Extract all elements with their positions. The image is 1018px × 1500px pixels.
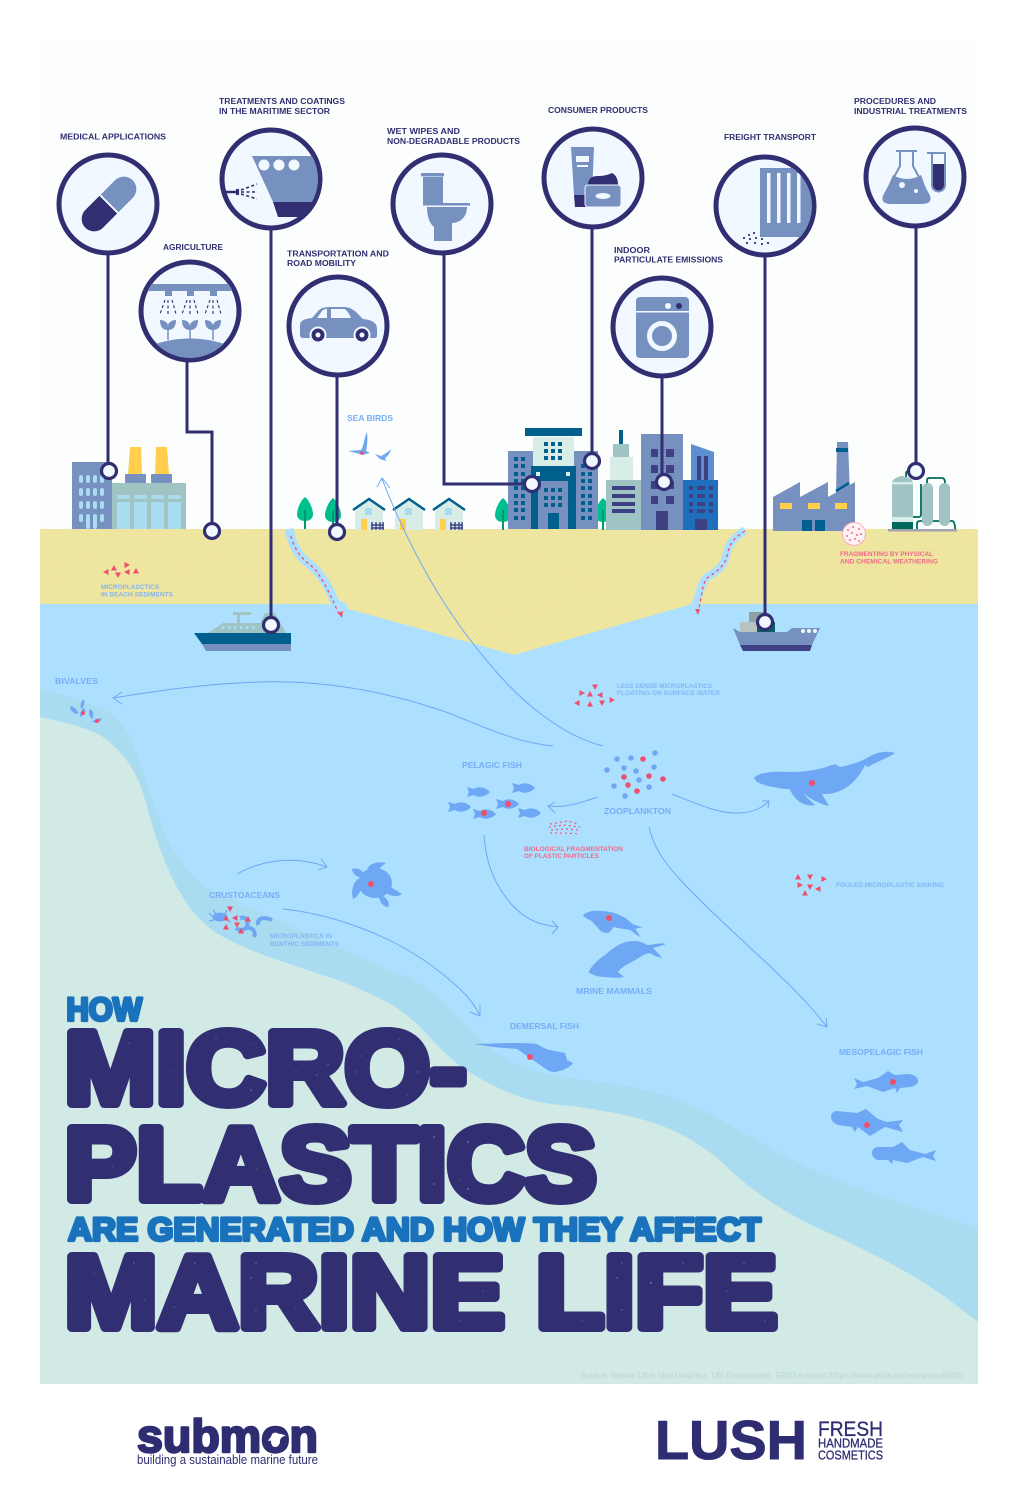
crustaceans: BENTHIC SEDIMENTS [270, 941, 340, 948]
source: wet wipes [387, 126, 520, 253]
icon: wave in logo [268, 1434, 286, 1444]
arrow: to bivalves [113, 682, 553, 746]
icon: bird with plastic [348, 432, 370, 455]
biological fragmentation: OF PLASTIC PARTICLES [524, 853, 600, 860]
panel: benthic sediment band [40, 688, 978, 1384]
icon: bird [375, 449, 391, 461]
source note: Source: Marine Litter Vital Graphics. UN-Environment, GRID-Arendal (https://www.grida.no/resources/6933). [581, 1371, 965, 1380]
triangles: sinking plastics [795, 874, 827, 896]
crustaceans: CRUSTOACEANS [209, 890, 280, 900]
connector: wet wipes [444, 250, 540, 492]
source: indoor particulate emissions [613, 245, 723, 376]
source: agriculture [140, 242, 240, 370]
arrow: zooplankton to whale [672, 794, 769, 813]
marine mammals [576, 911, 666, 996]
sea birds [347, 413, 393, 461]
connector: freight transport [758, 252, 772, 630]
demersal fish: DEMERSAL FISH [510, 1021, 579, 1031]
fouled microplastic sinking: FOULED MICROPLASTIC SINKING [836, 882, 944, 889]
connector: road transport [330, 372, 344, 540]
source: maritime treatments: TREATMENTS AND COATINGS [219, 96, 345, 106]
boat: cargo ship [733, 612, 820, 651]
source: industrial treatments: PROCEDURES AND [854, 96, 936, 106]
arrow: zooplankton to pelagic fish [548, 797, 598, 813]
triangles: floating plastics [574, 684, 615, 706]
connector: maritime [264, 225, 278, 632]
whale [754, 752, 895, 806]
connector: consumer products [584, 225, 600, 468]
panel: sandy beach [40, 529, 978, 655]
icons: shells [70, 699, 102, 723]
less dense microplastics: FLOATING ON SURFACE WATER [617, 690, 720, 697]
icon: car [300, 307, 377, 344]
fragmenting by weathering: FRAGMENTING BY PHYSICAL [840, 551, 933, 558]
logo: lush [655, 1409, 883, 1471]
icon: hull being sprayed [224, 156, 325, 217]
mesopelagic fish [831, 1047, 936, 1164]
title: plastics: PLASTICS [64, 1106, 596, 1222]
triangles: beach plastics [103, 562, 139, 578]
logo: lush: LUSH [655, 1409, 807, 1471]
arrow: crustaceans to demersal fish [283, 909, 480, 1016]
buildings: power plant at left [72, 447, 186, 529]
panel: sea floor [40, 717, 978, 1384]
connector: agriculture [187, 358, 220, 538]
arrow: pelagic fish to marine mammals [484, 835, 558, 934]
pelagic fish [448, 760, 541, 819]
crustaceans [209, 890, 340, 948]
less dense microplastics [574, 683, 720, 706]
icon: fragmenting particle [842, 522, 866, 546]
microplastics in beach sediments: MICROPLASCTICS [101, 584, 160, 591]
source: industrial treatments: INDUSTRIAL TREATMENTS [854, 106, 967, 116]
source: freight transport [716, 132, 817, 255]
logo: lush: HANDMADE [818, 1436, 883, 1450]
demersal fish [474, 1021, 579, 1072]
icon: washing machine [636, 297, 689, 358]
icon: cosmetics tube and jar [571, 147, 621, 207]
panel: sky background [40, 42, 978, 532]
icons: crab and shrimps [209, 910, 272, 937]
bivalves: BIVALVES [55, 676, 98, 686]
source: road transport [287, 248, 389, 375]
marine mammals: MRINE MAMMALS [576, 986, 652, 996]
sea birds: SEA BIRDS [347, 413, 393, 423]
turtle [352, 862, 402, 907]
title [64, 992, 778, 1350]
fouled microplastic sinking [795, 874, 944, 896]
source: wet wipes: WET WIPES AND [387, 126, 460, 136]
title: are generated and how they affect: ARE GENERATED AND HOW THEY AFFECT [68, 1212, 761, 1248]
fragmenting by weathering [840, 522, 938, 566]
title: marine life: MARINE LIFE [64, 1234, 778, 1350]
microplastics in beach sediments [101, 562, 174, 598]
source: road transport: ROAD MOBILITY [287, 258, 356, 268]
buildings: factory [773, 442, 855, 531]
source: wet wipes: NON-DEGRADABLE PRODUCTS [387, 136, 520, 146]
source: industrial treatments [854, 96, 967, 226]
source: consumer products [544, 105, 648, 227]
biological fragmentation [524, 821, 623, 860]
pelagic fish: PELAGIC FISH [462, 760, 522, 770]
bivalves [55, 676, 102, 723]
arrow: zooplankton to mesopelagic fish [649, 827, 827, 1027]
icon: toilet [421, 173, 470, 241]
connector: medical applications [102, 250, 116, 478]
source: road transport: TRANSPORTATION AND [287, 248, 389, 258]
icon: flask and test tube [883, 150, 946, 203]
buildings: central city [508, 428, 718, 530]
panel: ocean water [40, 604, 978, 1384]
source: indoor particulate emissions: PARTICULATE EMISSIONS [614, 254, 723, 264]
logo: lush: FRESH [818, 1418, 883, 1441]
buildings: chemical plant [888, 471, 957, 532]
icon: capsule [76, 171, 142, 237]
source: maritime treatments [219, 96, 345, 228]
crustaceans: MICROPLASTICS IN [270, 933, 332, 940]
triangles: benthic plastics [223, 906, 251, 934]
river: left with plastic flow [289, 529, 346, 618]
trees [297, 497, 611, 530]
zooplankton [604, 750, 671, 816]
arrow: to sea birds [377, 478, 603, 746]
connector: industrial treatments [908, 223, 924, 478]
icon: irrigation and crops [148, 284, 232, 358]
source: consumer products: CONSUMER PRODUCTS [548, 105, 648, 115]
houses [353, 499, 465, 530]
zooplankton: ZOOPLANKTON [604, 806, 671, 816]
arrow: crustaceans to turtle [237, 859, 327, 874]
connector: indoor emissions [656, 373, 672, 490]
logo: lush: COSMETICS [818, 1448, 883, 1462]
fragmenting by weathering: AND CHEMICAL WEATHERING [840, 558, 938, 566]
icon: container and dust [743, 168, 815, 244]
title: how: HOW [66, 992, 143, 1028]
title: micro-: MICRO- [64, 1010, 466, 1126]
biological fragmentation: BIOLOGICAL FRAGMENTATION [524, 846, 623, 853]
river: right with plastic flow [694, 530, 745, 615]
source: maritime treatments: IN THE MARITIME SECTOR [219, 106, 331, 116]
less dense microplastics: LESS DENSE MICROPLASTICS [617, 683, 713, 690]
mesopelagic fish: MESOPELAGIC FISH [839, 1047, 923, 1057]
microplastics in beach sediments: IN BEACH SEDIMENTS [101, 592, 174, 598]
boat: yacht [194, 612, 291, 651]
source: medical applications [59, 132, 166, 253]
source: indoor particulate emissions: INDOOR [614, 245, 651, 255]
source: agriculture: AGRICULTURE [163, 242, 223, 252]
icon: fragment particles [549, 821, 580, 834]
source: medical applications: MEDICAL APPLICATIONS [60, 132, 166, 142]
logo: submon: submon [137, 1410, 318, 1462]
source: freight transport: FREIGHT TRANSPORT [724, 132, 817, 142]
logo: submon: building a sustainable marine future [137, 1453, 318, 1467]
